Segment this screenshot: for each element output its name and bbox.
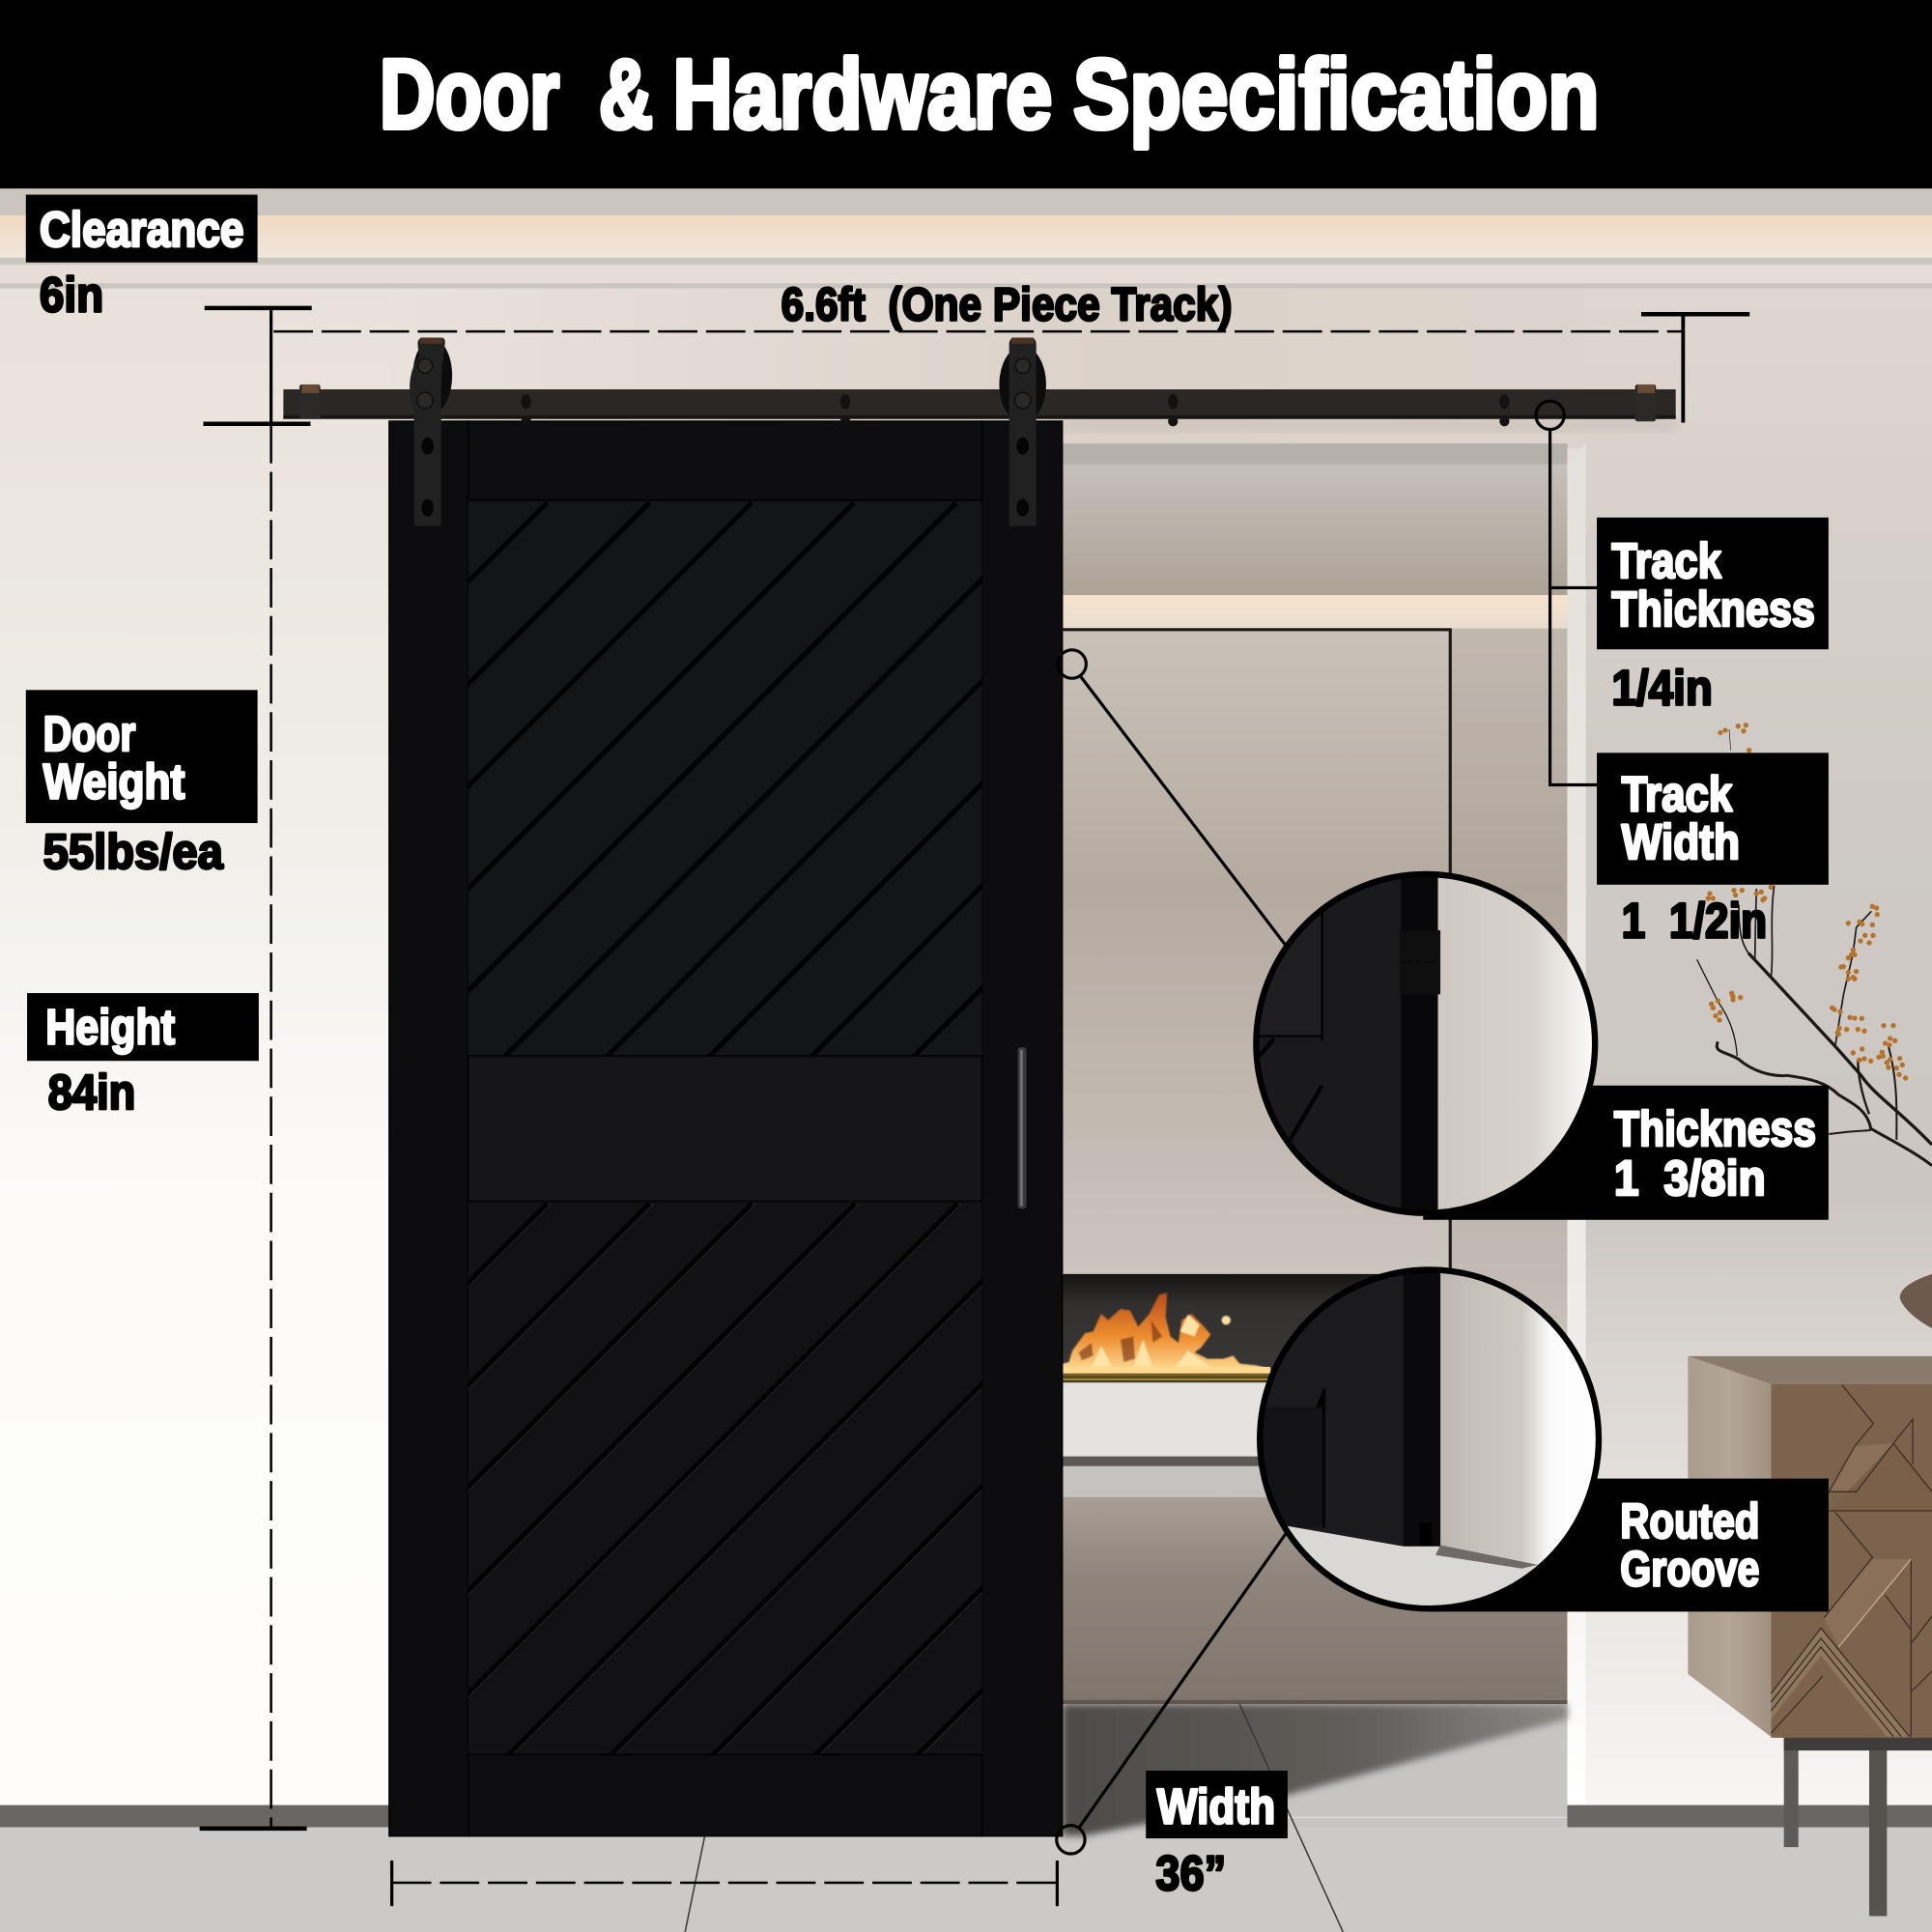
track callout connector bbox=[1536, 401, 1598, 784]
label: height bbox=[27, 993, 259, 1120]
left wall bbox=[0, 288, 389, 1805]
dimension line: door width bbox=[392, 1861, 1057, 1906]
upper diagonal panel bbox=[469, 501, 981, 1055]
label: height: Height bbox=[45, 999, 175, 1054]
hearth bbox=[1062, 1383, 1419, 1457]
magnifier: routed groove bbox=[1257, 1269, 1602, 1627]
label: routed groove panel bbox=[1430, 1479, 1829, 1611]
label: width bbox=[1146, 1771, 1288, 1901]
label: track length: 6.6ft (One Piece Track) bbox=[781, 279, 1233, 331]
title: & bbox=[599, 40, 653, 150]
lower diagonal panel bbox=[468, 1202, 981, 1754]
right wall bbox=[1584, 288, 1932, 1805]
fireplace bbox=[1062, 1274, 1419, 1382]
label: track thickness: Thickness bbox=[1611, 582, 1815, 637]
label: routed groove text: Routed bbox=[1620, 1493, 1759, 1548]
hanger left bbox=[410, 337, 452, 526]
door handle bbox=[1018, 1047, 1026, 1208]
label: door thickness panel bbox=[1423, 1086, 1829, 1220]
label: door weight: 55lbs/ea bbox=[43, 824, 223, 879]
pillar bbox=[1567, 442, 1586, 1805]
label: clearance: 6in bbox=[40, 268, 103, 323]
title: Specification bbox=[1073, 40, 1600, 150]
track bolts above bbox=[522, 394, 1509, 409]
title: Door bbox=[380, 40, 559, 150]
door rails bbox=[469, 421, 982, 1836]
label: track width: Track bbox=[1622, 766, 1733, 821]
magnifier: door thickness bbox=[1254, 872, 1600, 1217]
dimension lines: clearance and height bbox=[200, 308, 312, 1829]
floor bbox=[0, 1828, 1932, 1932]
label: door weight: Weight bbox=[43, 754, 185, 810]
inner floor bbox=[1062, 1704, 1567, 1828]
back wall bbox=[1062, 629, 1567, 1497]
left baseboard bbox=[0, 1805, 389, 1828]
label: height: 84in bbox=[48, 1065, 135, 1120]
label: track thickness bbox=[1597, 518, 1829, 716]
floor tile joints bbox=[685, 1704, 1343, 1932]
label: door thickness text: 1 3/8in bbox=[1614, 1151, 1766, 1206]
label: door thickness text: Thickness bbox=[1614, 1101, 1816, 1156]
dimension line: track length bbox=[273, 314, 1749, 423]
label: clearance bbox=[26, 195, 258, 323]
label: routed groove text bbox=[1620, 1493, 1759, 1597]
vase bbox=[1900, 1274, 1932, 1328]
cabinet bbox=[1688, 1356, 1932, 1917]
title bbox=[380, 40, 1600, 150]
label: door weight bbox=[26, 690, 258, 879]
rug bbox=[1062, 1497, 1567, 1701]
label: track width: 1 1/2in bbox=[1622, 894, 1767, 949]
door edge frame line bbox=[1062, 630, 1450, 1271]
branch with berries bbox=[1697, 723, 1932, 1166]
routed groove callout connector bbox=[1057, 1533, 1287, 1854]
title band bbox=[0, 0, 1932, 188]
track stops bbox=[299, 384, 1656, 421]
label: door thickness text bbox=[1614, 1101, 1816, 1206]
thickness callout connector bbox=[1058, 650, 1287, 947]
hanger right bbox=[999, 337, 1046, 526]
track wall shadow bbox=[1060, 419, 1676, 431]
label: routed groove text: Groove bbox=[1620, 1542, 1759, 1597]
light strip bbox=[1062, 595, 1567, 629]
sliding track bbox=[283, 384, 1676, 426]
barn door bbox=[388, 420, 1063, 1837]
cabinet relief tiles bbox=[1771, 1385, 1932, 1737]
flames bbox=[1061, 1293, 1270, 1380]
label: door weight: Door bbox=[43, 706, 135, 761]
cabinet legs bbox=[1784, 1737, 1932, 1917]
upper wall bbox=[389, 288, 1587, 448]
label: track thickness: Track bbox=[1611, 533, 1721, 588]
soffit bbox=[1062, 443, 1567, 465]
door stiles bbox=[389, 421, 1062, 1836]
label: track width bbox=[1597, 753, 1829, 949]
label: clearance: Clearance bbox=[40, 202, 244, 257]
label: track width: Width bbox=[1622, 814, 1740, 869]
ceiling cove bbox=[0, 188, 1932, 288]
label: width: Width bbox=[1157, 1779, 1275, 1834]
title: Hardware bbox=[672, 40, 1052, 150]
label: track thickness: 1/4in bbox=[1611, 661, 1713, 716]
doorway opening bbox=[1061, 442, 1932, 1836]
track bolts below bbox=[522, 414, 1509, 426]
label: width: 36” bbox=[1155, 1846, 1226, 1901]
